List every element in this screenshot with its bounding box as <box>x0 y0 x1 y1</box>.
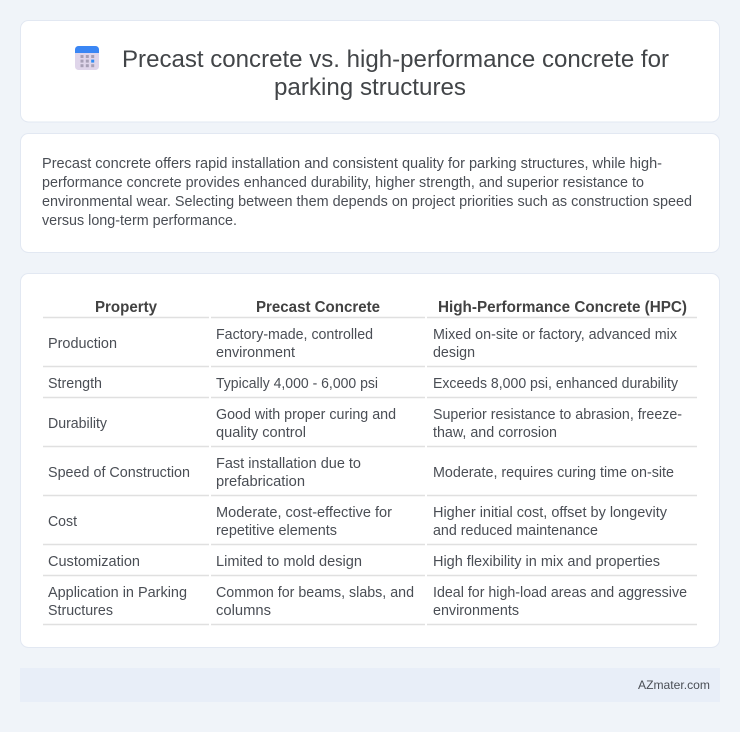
table header row <box>43 299 697 318</box>
table row: Production: Factory-made, controlled <box>216 327 373 343</box>
table header row: Precast Concrete <box>256 299 380 316</box>
table row: Production: Production <box>48 336 117 352</box>
table header row: Property <box>95 299 157 316</box>
panel: summary card <box>20 134 720 252</box>
table row: Durability: thaw, and corrosion <box>433 425 557 441</box>
table row: Durability: Superior resistance to abrasion, freeze- <box>433 407 682 423</box>
table row: Durability <box>43 407 697 446</box>
table row: Durability: Durability <box>48 416 108 432</box>
table header row: High-Performance Concrete (HPC) <box>438 299 687 316</box>
text block: summary paragraph: versus long-term performance. <box>42 213 237 229</box>
text block: summary paragraph <box>42 156 692 229</box>
table row: Speed of Construction: prefabrication <box>216 474 305 490</box>
title: parking structures <box>274 74 466 101</box>
table row: Customization: Limited to mold design <box>216 554 362 570</box>
table row: Strength: Strength <box>48 376 102 392</box>
table row: Speed of Construction: Moderate, requires curing time on-site <box>433 465 674 481</box>
text block: summary paragraph: environmental wear. Selecting between them depends on project priorities such as construction speed <box>42 194 692 210</box>
table row: Production: design <box>433 345 475 361</box>
table row: Durability: Good with proper curing and <box>216 407 396 423</box>
table row: Cost: Cost <box>48 514 77 530</box>
text block: summary paragraph: performance concrete provides enhanced durability, higher strength, and superior resistance to <box>42 175 644 191</box>
panel: comparison table card <box>20 274 720 648</box>
table row: Application in Parking Structures: Ideal for high-load areas and aggressive <box>433 585 687 601</box>
icon: calendar <box>75 46 99 70</box>
footer bar <box>20 668 720 702</box>
table row: Strength <box>43 376 697 398</box>
table row: Production <box>43 327 697 366</box>
panel: title card <box>20 20 720 122</box>
table row: Strength: Exceeds 8,000 psi, enhanced durability <box>433 376 679 392</box>
table row: Cost: Moderate, cost-effective for <box>216 505 392 521</box>
table row: Application in Parking Structures: Application in Parking <box>48 585 187 601</box>
table row: Application in Parking Structures: Structures <box>48 603 113 619</box>
table row: Cost: repetitive elements <box>216 523 337 539</box>
table row: Cost: and reduced maintenance <box>433 523 598 539</box>
table row: Speed of Construction: Speed of Construction <box>48 465 190 481</box>
table row: Cost <box>43 505 697 544</box>
table row: Application in Parking Structures: environments <box>433 603 519 619</box>
text block: summary paragraph: Precast concrete offers rapid installation and consistent quality for parking structures, while high- <box>42 156 662 172</box>
table row: Strength: Typically 4,000 - 6,000 psi <box>216 376 378 392</box>
table row: Durability: quality control <box>216 425 306 441</box>
table row: Customization: High flexibility in mix and properties <box>433 554 660 570</box>
table row: Application in Parking Structures: Common for beams, slabs, and <box>216 585 414 601</box>
table row: Speed of Construction: Fast installation due to <box>216 456 361 472</box>
table row: Speed of Construction <box>43 456 697 496</box>
table row: Customization: Customization <box>48 554 140 570</box>
table row: Production: Mixed on-site or factory, advanced mix <box>433 327 678 343</box>
table row: Cost: Higher initial cost, offset by longevity <box>433 505 668 521</box>
footer text: AZmater.com: AZmater.com <box>638 678 710 692</box>
table row: Application in Parking Structures: columns <box>216 603 271 619</box>
title: Precast concrete vs. high-performance concrete for <box>122 46 669 73</box>
title <box>122 46 669 101</box>
table row: Application in Parking Structures <box>43 585 697 624</box>
table row: Customization <box>43 554 697 576</box>
table row: Production: environment <box>216 345 295 361</box>
